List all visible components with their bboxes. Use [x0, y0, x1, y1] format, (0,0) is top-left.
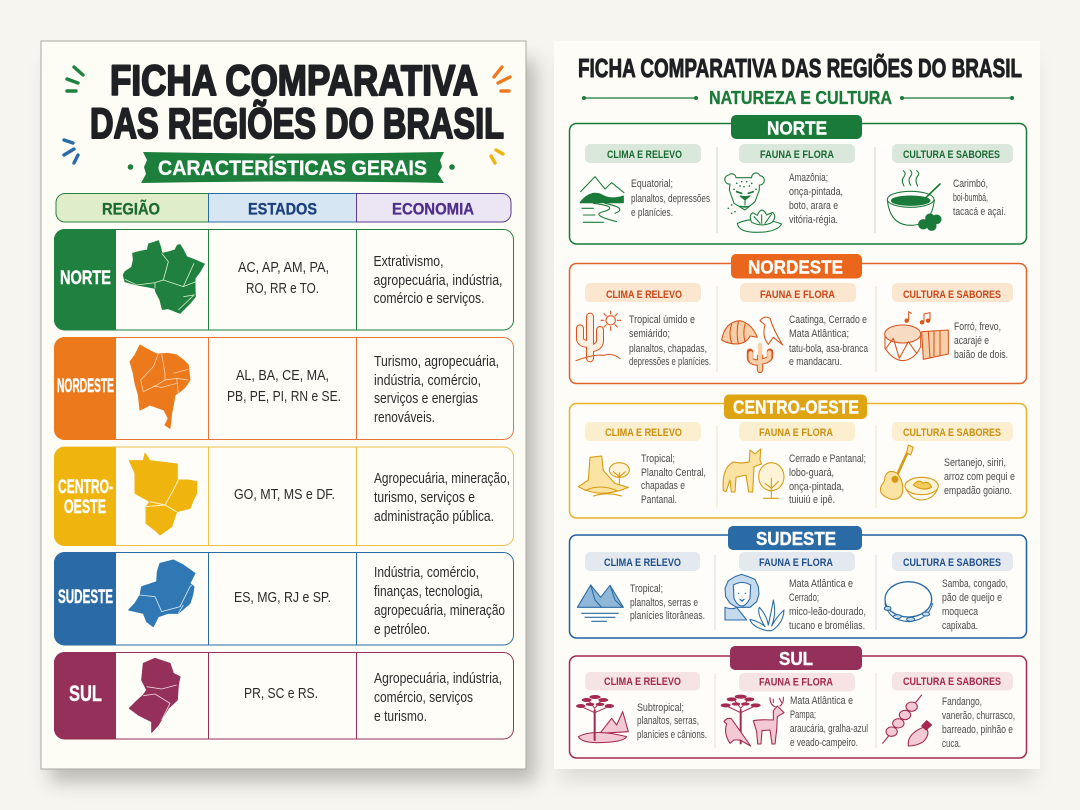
map: norte — [123, 241, 204, 313]
text: norte: tacacá e açaí. — [953, 206, 1006, 218]
map: sul — [129, 658, 180, 732]
icon: golden lion tamarin and bromeliad — [725, 574, 784, 631]
row: centro-oeste: OESTE — [64, 496, 106, 518]
text: nordeste — [629, 314, 1008, 368]
text: nordeste: semiárido; — [629, 328, 670, 340]
icons: sul — [576, 695, 932, 746]
panel: características gerais — [41, 41, 526, 769]
text: nordeste: Caatinga, Cerrado e — [789, 314, 867, 326]
section: sudeste — [570, 526, 1026, 638]
chips: sudeste: CULTURA E SABORES — [903, 557, 1001, 569]
chips: sul — [585, 672, 1013, 692]
icon: araucaria and canyons — [576, 695, 628, 743]
chips: centro-oeste — [585, 422, 1013, 441]
chips: sudeste: CLIMA E RELEVO — [604, 557, 681, 569]
text: sul: vanerão, churrasco, — [942, 710, 1015, 722]
text: centro-oeste: lobo-guará, — [789, 467, 834, 479]
chips: nordeste: CLIMA E RELEVO — [606, 289, 682, 301]
row: sul: Agropecuária, indústria, — [374, 671, 502, 687]
icons: sudeste — [577, 574, 933, 631]
icon: skewer and cuca — [883, 695, 932, 746]
icon: jaguar and water lily — [725, 173, 782, 232]
row: sudeste: agropecuária, mineração — [374, 603, 505, 619]
text: norte: boi-bumbá, — [953, 192, 988, 204]
text: nordeste: Mata Atlântica; — [789, 328, 849, 340]
icon: guitar and dish — [880, 445, 938, 500]
chips: centro-oeste: CULTURA E SABORES — [903, 427, 1001, 439]
text: nordeste: Forró, frevo, — [954, 321, 1001, 333]
table header: ECONOMIA — [392, 200, 474, 218]
row: sudeste: SUDESTE — [58, 586, 113, 608]
text: sudeste: moqueca — [942, 606, 978, 618]
text: norte: onça-pintada, — [789, 186, 843, 198]
row: norte: NORTE — [60, 267, 111, 289]
row: sul: SUL — [69, 681, 102, 706]
row: centro-oeste: Agropecuária, mineração, — [374, 471, 510, 487]
row: sul: comércio, serviços — [374, 690, 473, 706]
heading: sudeste: SUDESTE — [756, 528, 836, 549]
text: centro-oeste: Sertanejo, siriri, — [944, 457, 1006, 469]
section: centro-oeste — [570, 394, 1026, 518]
row: centro-oeste: administração pública. — [374, 509, 494, 525]
map: sudeste — [129, 560, 195, 627]
chips: nordeste — [585, 283, 1013, 302]
text: norte: e planícies. — [631, 207, 673, 219]
section: nordeste — [570, 254, 1026, 384]
subtitle — [582, 88, 1014, 108]
text: centro-oeste: tuiuiú e ipê. — [789, 494, 835, 506]
text: sul: Pampa; — [790, 709, 816, 721]
chips: sudeste: FAUNA E FLORA — [759, 557, 833, 569]
section: sul — [570, 646, 1026, 758]
row: sudeste — [54, 552, 514, 645]
text: norte: Amazônia; — [789, 172, 828, 184]
text: sudeste: Mata Atlântica e — [789, 578, 853, 590]
text: sul: planaltos, serras, — [637, 715, 699, 727]
row: centro-oeste: CENTRO- — [58, 476, 113, 498]
title: DAS REGIÕES DO BRASIL — [90, 99, 504, 148]
icon: plateau and cerrado tree — [578, 456, 629, 496]
subtitle: NATUREZA E CULTURA — [709, 88, 892, 108]
icon: tambourine — [884, 582, 933, 622]
chips: nordeste: CULTURA E SABORES — [903, 289, 1001, 301]
icon: mountains and water — [577, 585, 623, 621]
row: nordeste: PB, PE, PI, RN e SE. — [227, 388, 341, 405]
map: nordeste — [130, 345, 190, 428]
table header: ESTADOS — [248, 200, 317, 218]
text: nordeste: e mandacaru. — [789, 356, 842, 368]
text: norte: Carimbó, — [953, 178, 988, 190]
text: nordeste: baião de dois. — [954, 349, 1008, 361]
chips: norte: FAUNA E FLORA — [760, 149, 834, 161]
map: centro-oeste — [129, 453, 197, 535]
icons: norte — [580, 170, 941, 232]
chips: centro-oeste: FAUNA E FLORA — [759, 427, 833, 439]
text: nordeste: depressões e planícies. — [629, 356, 711, 368]
text: nordeste: planaltos, chapadas, — [629, 343, 707, 355]
title: FICHA COMPARATIVA — [110, 57, 478, 105]
text: centro-oeste: Cerrado e Pantanal; — [789, 453, 866, 465]
icons: nordeste — [576, 311, 948, 370]
icon: cactus and sun — [576, 311, 621, 361]
row: norte: RO, RR e TO. — [246, 280, 319, 297]
text: sul — [637, 695, 1015, 750]
text: sudeste: Tropical; — [630, 583, 663, 595]
text: sul: planícies e cânions. — [637, 729, 707, 741]
text: nordeste: Tropical úmido e — [629, 314, 695, 326]
row: norte: agropecuária, indústria, — [374, 273, 502, 289]
icon: mountains and river — [580, 177, 624, 222]
row: sudeste: Indústria, comércio, — [374, 565, 479, 581]
banner: características gerais: CARACTERÍSTICAS GERAIS — [158, 157, 427, 180]
text: norte: vitória-régia. — [789, 214, 838, 226]
text: norte: boto, arara e — [789, 200, 838, 212]
text: centro-oeste: chapadas e — [641, 480, 685, 492]
icons: centro-oeste — [578, 445, 938, 500]
chips: sul: FAUNA E FLORA — [759, 676, 833, 688]
row: centro-oeste: GO, MT, MS e DF. — [234, 486, 335, 503]
text: centro-oeste: Planalto Central, — [641, 467, 706, 479]
chips: norte — [585, 144, 1013, 163]
text: sudeste: planícies litorâneas. — [630, 610, 705, 622]
chips: nordeste: FAUNA E FLORA — [760, 289, 835, 301]
row: norte: Extrativismo, — [374, 254, 444, 270]
chips: centro-oeste: CLIMA E RELEVO — [605, 427, 682, 439]
heading: sul — [730, 646, 862, 670]
text: norte: Equatorial; — [631, 178, 673, 190]
row: sudeste: e petróleo. — [374, 622, 430, 638]
text: sudeste: planaltos, serras e — [630, 597, 698, 609]
text: centro-oeste — [641, 453, 1015, 506]
row: sul — [54, 652, 514, 739]
heading: nordeste: NORDESTE — [748, 256, 843, 278]
table header: REGIÃO — [102, 198, 160, 218]
row: sudeste: finanças, tecnologia, — [374, 584, 483, 600]
heading: sul: SUL — [779, 648, 813, 669]
text: sul: araucária, gralha-azul — [790, 723, 868, 735]
text: nordeste: acarajé e — [954, 335, 989, 347]
row: norte: AC, AP, AM, PA, — [238, 259, 329, 276]
icon: confetti strokes — [64, 67, 510, 163]
heading: norte — [731, 115, 862, 139]
text: sul: barreado, pinhão e — [942, 724, 1013, 736]
row: nordeste: serviços e energias — [374, 391, 478, 407]
text: sul: cuca. — [942, 738, 961, 750]
text: sudeste: tucano e bromélias. — [789, 620, 865, 632]
text: centro-oeste: Pantanal. — [641, 494, 677, 506]
text: sul: e veado-campeiro. — [790, 737, 858, 749]
row: sul: PR, SC e RS. — [244, 685, 318, 702]
text: sudeste: pão de queijo e — [942, 592, 1002, 604]
row: sudeste: ES, MG, RJ e SP. — [234, 589, 331, 606]
chips: sudeste — [585, 552, 1013, 571]
text: centro-oeste: Tropical; — [641, 453, 675, 465]
row: norte — [54, 229, 514, 330]
panel: natureza e cultura — [554, 41, 1040, 769]
text: nordeste: tatu-bola, asa-branca — [789, 343, 868, 355]
chips: norte: CLIMA E RELEVO — [607, 149, 682, 161]
row: nordeste — [54, 337, 514, 440]
row: centro-oeste: turismo, serviços e — [374, 490, 475, 506]
text: centro-oeste: onça-pintada, — [789, 481, 844, 493]
text: sul: Subtropical; — [637, 702, 684, 714]
text: sudeste: Cerrado; — [789, 592, 819, 604]
text: sudeste — [630, 578, 1008, 632]
banner: características gerais — [128, 152, 455, 183]
title — [90, 57, 504, 148]
chips: sul: CLIMA E RELEVO — [604, 676, 681, 688]
icon: bowl of tacacá with açaí — [887, 170, 941, 230]
chips: sul: CULTURA E SABORES — [903, 676, 1001, 688]
table header — [56, 194, 511, 222]
chips: norte: CULTURA E SABORES — [903, 149, 1000, 161]
section: norte — [570, 115, 1026, 244]
text: sudeste: mico-leão-dourado, — [789, 606, 866, 618]
icon: drum, accordion and music notes — [885, 312, 948, 361]
text: sudeste: capixaba. — [942, 620, 978, 632]
row: nordeste: indústria, comércio, — [374, 373, 481, 389]
icon: araucaria, azure jay and pampas deer — [721, 695, 784, 746]
row: sul: e turismo. — [374, 709, 427, 725]
text: sul: Fandango, — [942, 696, 982, 708]
row: nordeste: NORDESTE — [57, 375, 114, 397]
heading: nordeste — [731, 254, 862, 278]
row: nordeste: Turismo, agropecuária, — [374, 354, 499, 370]
text: centro-oeste: arroz com pequi e — [944, 471, 1015, 483]
row: centro-oeste — [54, 447, 514, 546]
text: centro-oeste: empadão goiano. — [944, 485, 1012, 497]
row: nordeste: AL, BA, CE, MA, — [236, 367, 329, 384]
heading: sudeste — [728, 526, 862, 550]
text: sudeste: Samba, congado, — [942, 578, 1008, 590]
text: norte — [631, 172, 1006, 226]
row: norte: comércio e serviços. — [374, 291, 484, 307]
heading: norte: NORTE — [767, 118, 827, 138]
text: norte: planaltos, depressões — [631, 193, 710, 205]
icon: maned wolf and ipê — [723, 449, 784, 498]
heading: centro-oeste: CENTRO-OESTE — [733, 396, 859, 418]
row: nordeste: renováveis. — [374, 410, 435, 426]
icon: armadillo, white-winged dove and mandacaru — [722, 317, 783, 370]
text: sul: Mata Atlântica e — [790, 695, 853, 707]
